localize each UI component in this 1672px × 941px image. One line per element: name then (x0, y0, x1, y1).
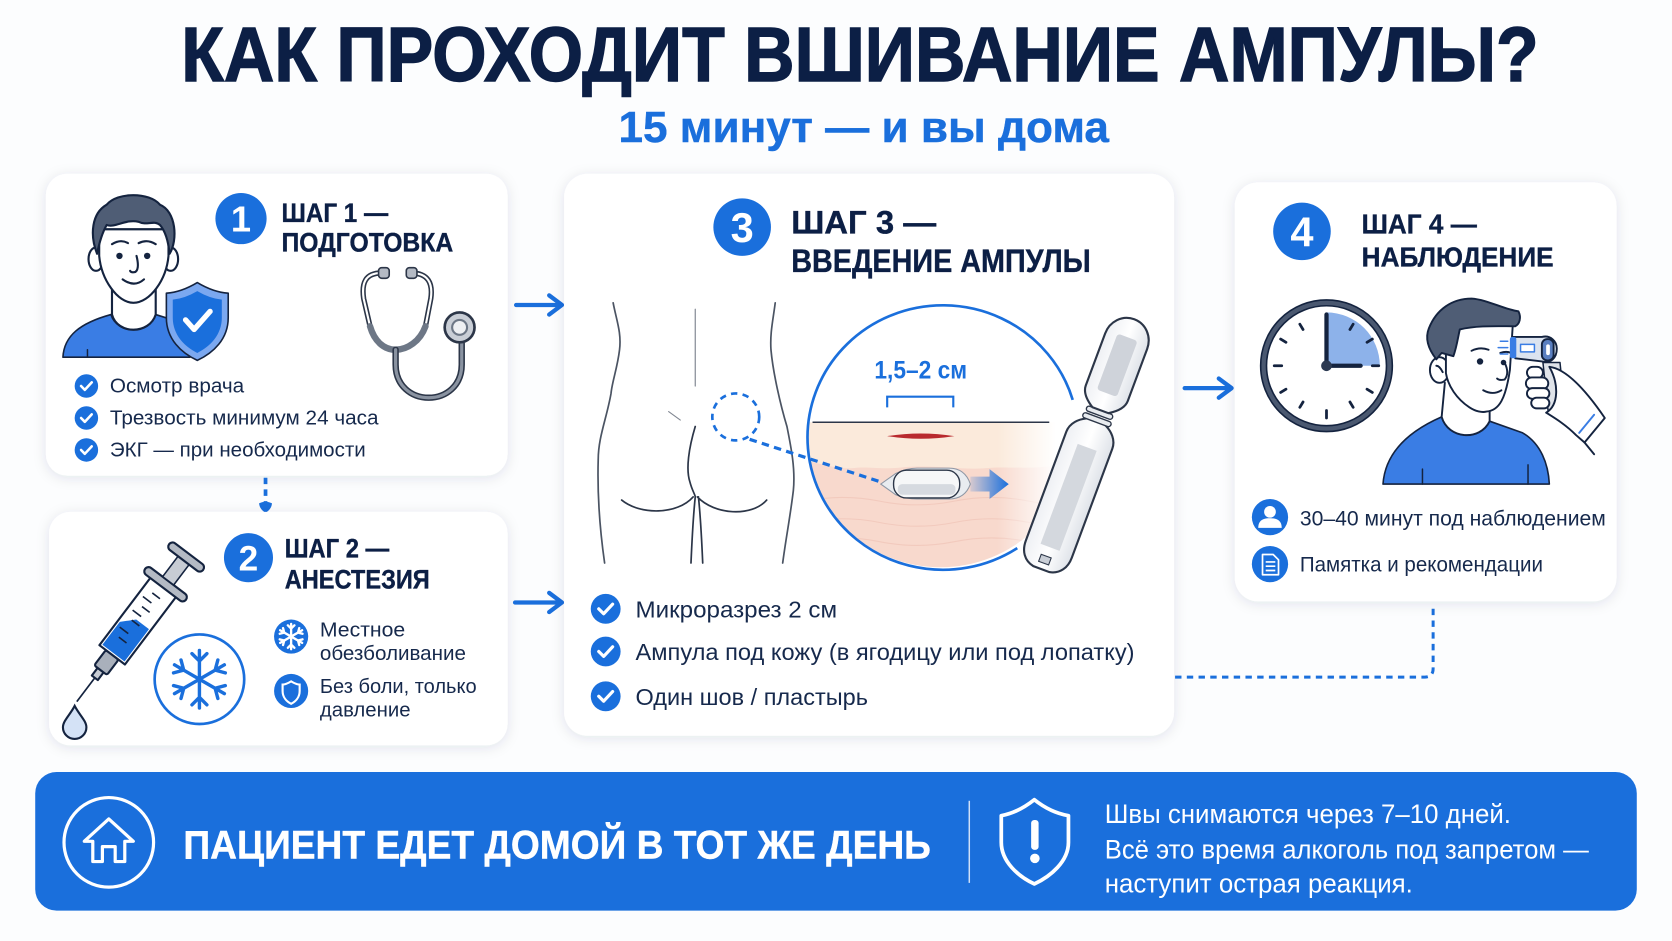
step 3 number badge (713, 198, 771, 256)
local anesthesia item (274, 620, 466, 665)
body outline illustration (598, 303, 794, 563)
banner headline: ПАЦИЕНТ ЕДЕТ ДОМОЙ В ТОТ ЖЕ ДЕНЬ (183, 822, 931, 867)
banner warning text: Швы снимаются через 7–10 дней. (1105, 799, 1511, 829)
step 3 heading: ШАГ 3 — (791, 205, 936, 241)
icon: stethoscope (363, 268, 475, 398)
step 1 heading (282, 198, 453, 258)
local anesthesia item: Местное (320, 620, 405, 642)
step 4 number badge (1273, 203, 1331, 260)
checklist: step 3: Ампула под кожу (в ягодицу или под лопатку) (636, 639, 1135, 665)
observation item: 30–40 минут под наблюдением (1300, 507, 1606, 531)
step 3 number badge: 3 (731, 204, 754, 251)
icon: house in circle (64, 798, 154, 887)
incision size bracket (887, 397, 953, 407)
incision size label: 1,5–2 см (874, 358, 967, 385)
icon: glass ampoule (1018, 311, 1157, 578)
step 1 heading: ШАГ 1 — (282, 198, 388, 228)
checklist: step 1 (75, 374, 379, 462)
icon: smiling patient (63, 195, 190, 357)
panel: step 4 observation (1235, 182, 1617, 601)
step 4 heading: ШАГ 4 — (1362, 209, 1477, 240)
memo item (1252, 546, 1543, 582)
checklist: step 1: ЭКГ — при необходимости (110, 439, 366, 461)
step 2 number badge (224, 533, 273, 582)
local anesthesia item: обезболивание (320, 643, 466, 665)
icon: drop (63, 706, 86, 739)
step 3 heading: ВВЕДЕНИЕ АМПУЛЫ (791, 243, 1091, 279)
arrow: step 1 to step 3 (516, 295, 562, 315)
dashed connector: step 3 to step 4 (1175, 604, 1433, 677)
step 4 heading: НАБЛЮДЕНИЕ (1362, 242, 1554, 273)
arrow: step 1 to step 2 (259, 478, 272, 513)
no pain item: давление (320, 700, 411, 722)
magnified skin cross-section (805, 305, 1073, 576)
panel: step 2 anesthesia (49, 512, 508, 745)
subtitle: 15 минут — и вы дома (618, 103, 1110, 152)
checklist: step 3: Микроразрез 2 см (636, 596, 837, 622)
step 2 heading (285, 534, 430, 595)
banner: same day discharge (35, 772, 1637, 911)
arrow: step 3 to step 4 (1185, 379, 1232, 398)
step 1 heading: ПОДГОТОВКА (282, 228, 453, 258)
step 2 number badge: 2 (239, 539, 258, 578)
step 4 heading (1362, 209, 1554, 273)
checklist: step 3: Один шов / пластырь (636, 684, 868, 710)
panel: step 1 preparation (46, 174, 508, 476)
title: КАК ПРОХОДИТ ВШИВАНИЕ АМПУЛЫ? (181, 13, 1539, 98)
arrow: step 2 to step 3 (515, 593, 562, 612)
icon: clock (1264, 303, 1389, 429)
checklist: step 1: Трезвость минимум 24 часа (110, 407, 379, 429)
banner warning text: Всё это время алкоголь под запретом — (1105, 834, 1589, 864)
icon: warning shield (1001, 800, 1068, 884)
icon: syringe (56, 538, 209, 717)
icon: shield with check (166, 283, 228, 360)
checklist: step 3 (591, 594, 1135, 711)
no pain item: Без боли, только (320, 676, 477, 698)
step 1 number badge (215, 193, 267, 244)
implanted ampoule with arrow (881, 468, 1009, 499)
step 2 heading: АНЕСТЕЗИЯ (285, 565, 430, 595)
banner warning text (1105, 799, 1589, 898)
observation item (1252, 499, 1606, 535)
icon: snowflake in circle (155, 634, 244, 724)
step 4 number badge: 4 (1290, 208, 1314, 255)
step 3 heading (791, 205, 1091, 279)
step 2 heading: ШАГ 2 — (285, 534, 390, 564)
no pain item (274, 674, 477, 722)
memo item: Памятка и рекомендации (1300, 553, 1543, 577)
step 1 number badge: 1 (231, 198, 251, 239)
dashed pointer to implant site (712, 393, 881, 482)
icon: patient with thermometer (1383, 299, 1605, 484)
panel: step 3 ampoule insertion (564, 174, 1174, 736)
checklist: step 1: Осмотр врача (110, 375, 245, 397)
banner warning text: наступит острая реакция. (1105, 868, 1413, 898)
